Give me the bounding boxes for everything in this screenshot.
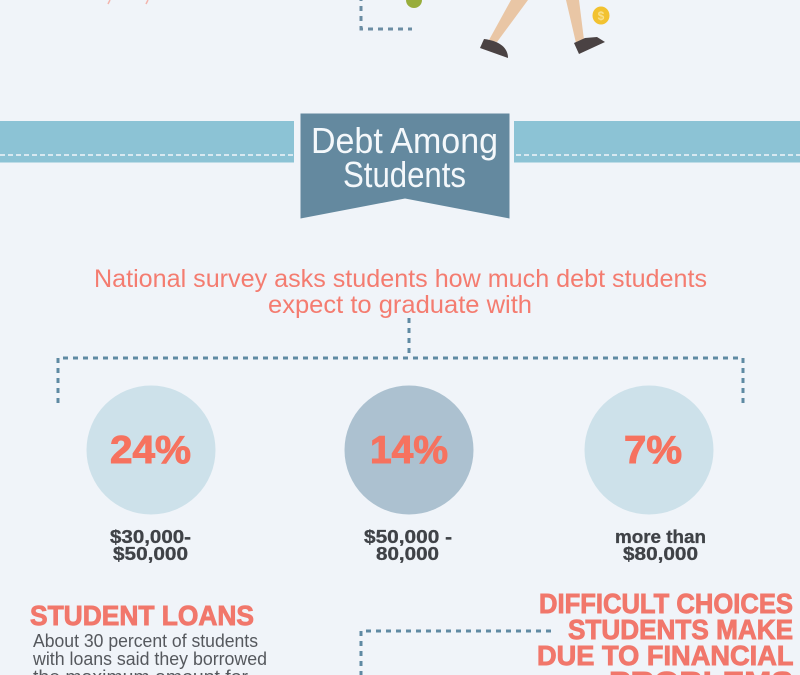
section heading banner [300,114,510,218]
survey intro text: expect to graduate with [268,291,532,319]
stat: 7%: more than [615,527,706,547]
dashed connector: bottom [361,631,551,675]
heading: Difficult Choices: DUE TO FINANCIAL [537,640,793,671]
icon: green coin fragment [406,0,422,8]
dashed connector: top [361,0,412,29]
stat: 24%: $50,000 [113,544,188,564]
stat: 24%: 24% [110,429,191,472]
dashed bracket connecting stats [58,318,743,403]
heading: Debt Among Students: Students [343,154,466,195]
stat: 7%: 7% [624,429,682,472]
stat: 14%: 80,000 [376,544,439,564]
stat: 14% [344,386,474,564]
stat: 14%: $50,000 - [364,527,452,547]
stat: 24% [86,386,216,564]
survey intro text: National survey asks students how much debt students [94,265,707,293]
stat: 24%: $30,000- [110,527,191,547]
heading: Student Loans: STUDENT LOANS [30,600,254,631]
student loans body text: with loans said they borrowed [32,649,267,669]
heading: Debt Among Students: Debt Among [311,120,498,161]
stat: 7%: $80,000 [623,544,698,564]
student loans body text: About 30 percent of students [33,631,258,651]
stat: 7% [584,386,714,564]
ribbon band: right [514,121,800,162]
illustration: walking legs with coin [480,0,610,58]
clipped text remnants at top [108,0,148,4]
ribbon band: left [0,121,294,162]
stat: 14%: 14% [370,429,448,472]
icon: dollar coin: $ [598,9,605,23]
